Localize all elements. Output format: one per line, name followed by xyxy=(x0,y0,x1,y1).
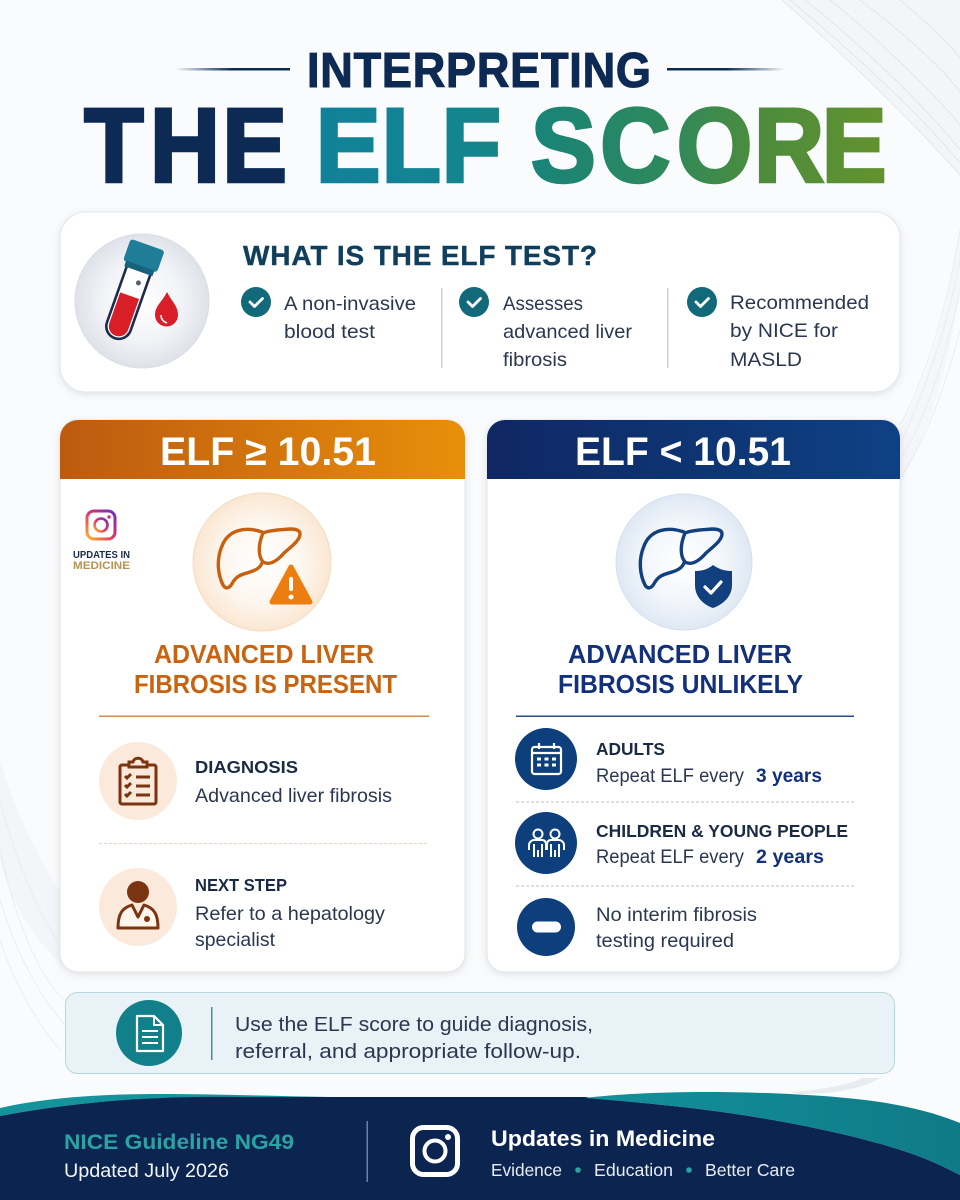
item: diagnosis: DIAGNOSIS xyxy=(195,757,298,777)
point: recommended by NICE xyxy=(687,287,869,371)
item: children and young people: Repeat ELF every xyxy=(596,846,744,868)
point: recommended by NICE: by NICE for xyxy=(730,320,839,342)
icon: liver with warning xyxy=(193,493,331,631)
callout: use the ELF score: Use the ELF score to guide diagnosis, xyxy=(235,1013,593,1036)
heading: fibrosis present: ADVANCED LIVER xyxy=(154,641,374,669)
item: adults: Repeat ELF every xyxy=(596,765,744,787)
header band orange: ELF ≥ 10.51 xyxy=(160,430,376,474)
heading: WHAT IS THE ELF TEST? xyxy=(243,240,597,271)
item: children and young people: CHILDREN & YOUNG PEOPLE xyxy=(596,821,848,841)
header band orange xyxy=(60,420,465,479)
item: no interim testing: No interim fibrosis xyxy=(596,904,757,926)
icon: instagram xyxy=(412,1128,458,1174)
heading: fibrosis present: FIBROSIS IS PRESENT xyxy=(134,671,397,699)
icon: liver with shield xyxy=(616,494,752,630)
point: non-invasive: blood test xyxy=(284,321,376,343)
heading: fibrosis unlikely: ADVANCED LIVER xyxy=(568,641,792,669)
point: assesses fibrosis xyxy=(459,287,633,371)
title rule left xyxy=(175,68,290,70)
callout: use the ELF score: referral, and appropriate follow-up. xyxy=(235,1040,581,1063)
icon: clipboard xyxy=(120,758,156,804)
header band navy xyxy=(487,420,900,479)
item: next step: Refer to a hepatology xyxy=(195,903,385,925)
item: diagnosis: Advanced liver fibrosis xyxy=(195,785,392,807)
icon: document xyxy=(116,1000,182,1066)
heading: fibrosis unlikely xyxy=(558,641,803,699)
footer: guideline reference: NICE Guideline NG49 xyxy=(64,1131,294,1154)
header band navy: ELF < 10.51 xyxy=(575,430,791,474)
panel: ELF below 10.51 xyxy=(487,420,900,972)
item: no interim testing: testing required xyxy=(596,930,734,952)
footer: brand: Better Care xyxy=(705,1160,795,1180)
heading: fibrosis unlikely: FIBROSIS UNLIKELY xyxy=(558,671,803,699)
title line: THE ELF SCORE: THE ELF SCORE xyxy=(84,87,887,204)
point: recommended by NICE: MASLD xyxy=(730,349,802,371)
icon: test tube and blood drop xyxy=(75,234,209,368)
watermark: Updates in Medicine: UPDATES IN xyxy=(73,550,130,561)
footer: guideline reference: Updated July 2026 xyxy=(64,1161,229,1182)
icon: calendar xyxy=(532,743,561,774)
watermark: Updates in Medicine: MEDICINE xyxy=(73,560,130,572)
panel: what is the ELF test xyxy=(60,212,900,392)
item: children and young people: 2 years xyxy=(756,846,824,868)
point: non-invasive: A non-invasive xyxy=(284,293,416,315)
point: non-invasive xyxy=(241,287,416,343)
watermark: Updates in Medicine xyxy=(73,511,130,572)
point: assesses fibrosis: Assesses xyxy=(503,293,583,315)
callout: use the ELF score xyxy=(66,992,894,1074)
heading: fibrosis present xyxy=(134,641,397,699)
item: next step: NEXT STEP xyxy=(195,875,287,895)
title xyxy=(84,42,887,204)
footer: guideline reference xyxy=(64,1131,294,1182)
point: assesses fibrosis: fibrosis xyxy=(503,349,567,371)
point: recommended by NICE: Recommended xyxy=(730,292,869,314)
footer: brand xyxy=(491,1126,795,1180)
item: adults: ADULTS xyxy=(596,739,665,759)
title line: INTERPRETING: INTERPRETING xyxy=(307,42,651,97)
item: next step: specialist xyxy=(195,929,276,951)
footer: brand: Education xyxy=(594,1160,673,1180)
item: next step xyxy=(99,868,385,951)
icon: two children xyxy=(529,830,564,857)
item: no interim testing xyxy=(517,898,757,956)
point: assesses fibrosis: advanced liver xyxy=(503,321,633,343)
panel: ELF at or above 10.51 xyxy=(60,420,465,972)
footer: brand: Evidence xyxy=(491,1160,562,1180)
item: adults: 3 years xyxy=(756,765,822,787)
footer band xyxy=(0,1092,960,1200)
item: diagnosis xyxy=(99,742,392,820)
item: adults xyxy=(515,728,822,790)
item: children and young people xyxy=(515,812,848,874)
icon: doctor xyxy=(118,881,158,928)
footer: brand: Updates in Medicine xyxy=(491,1126,715,1151)
title rule right xyxy=(667,68,785,70)
